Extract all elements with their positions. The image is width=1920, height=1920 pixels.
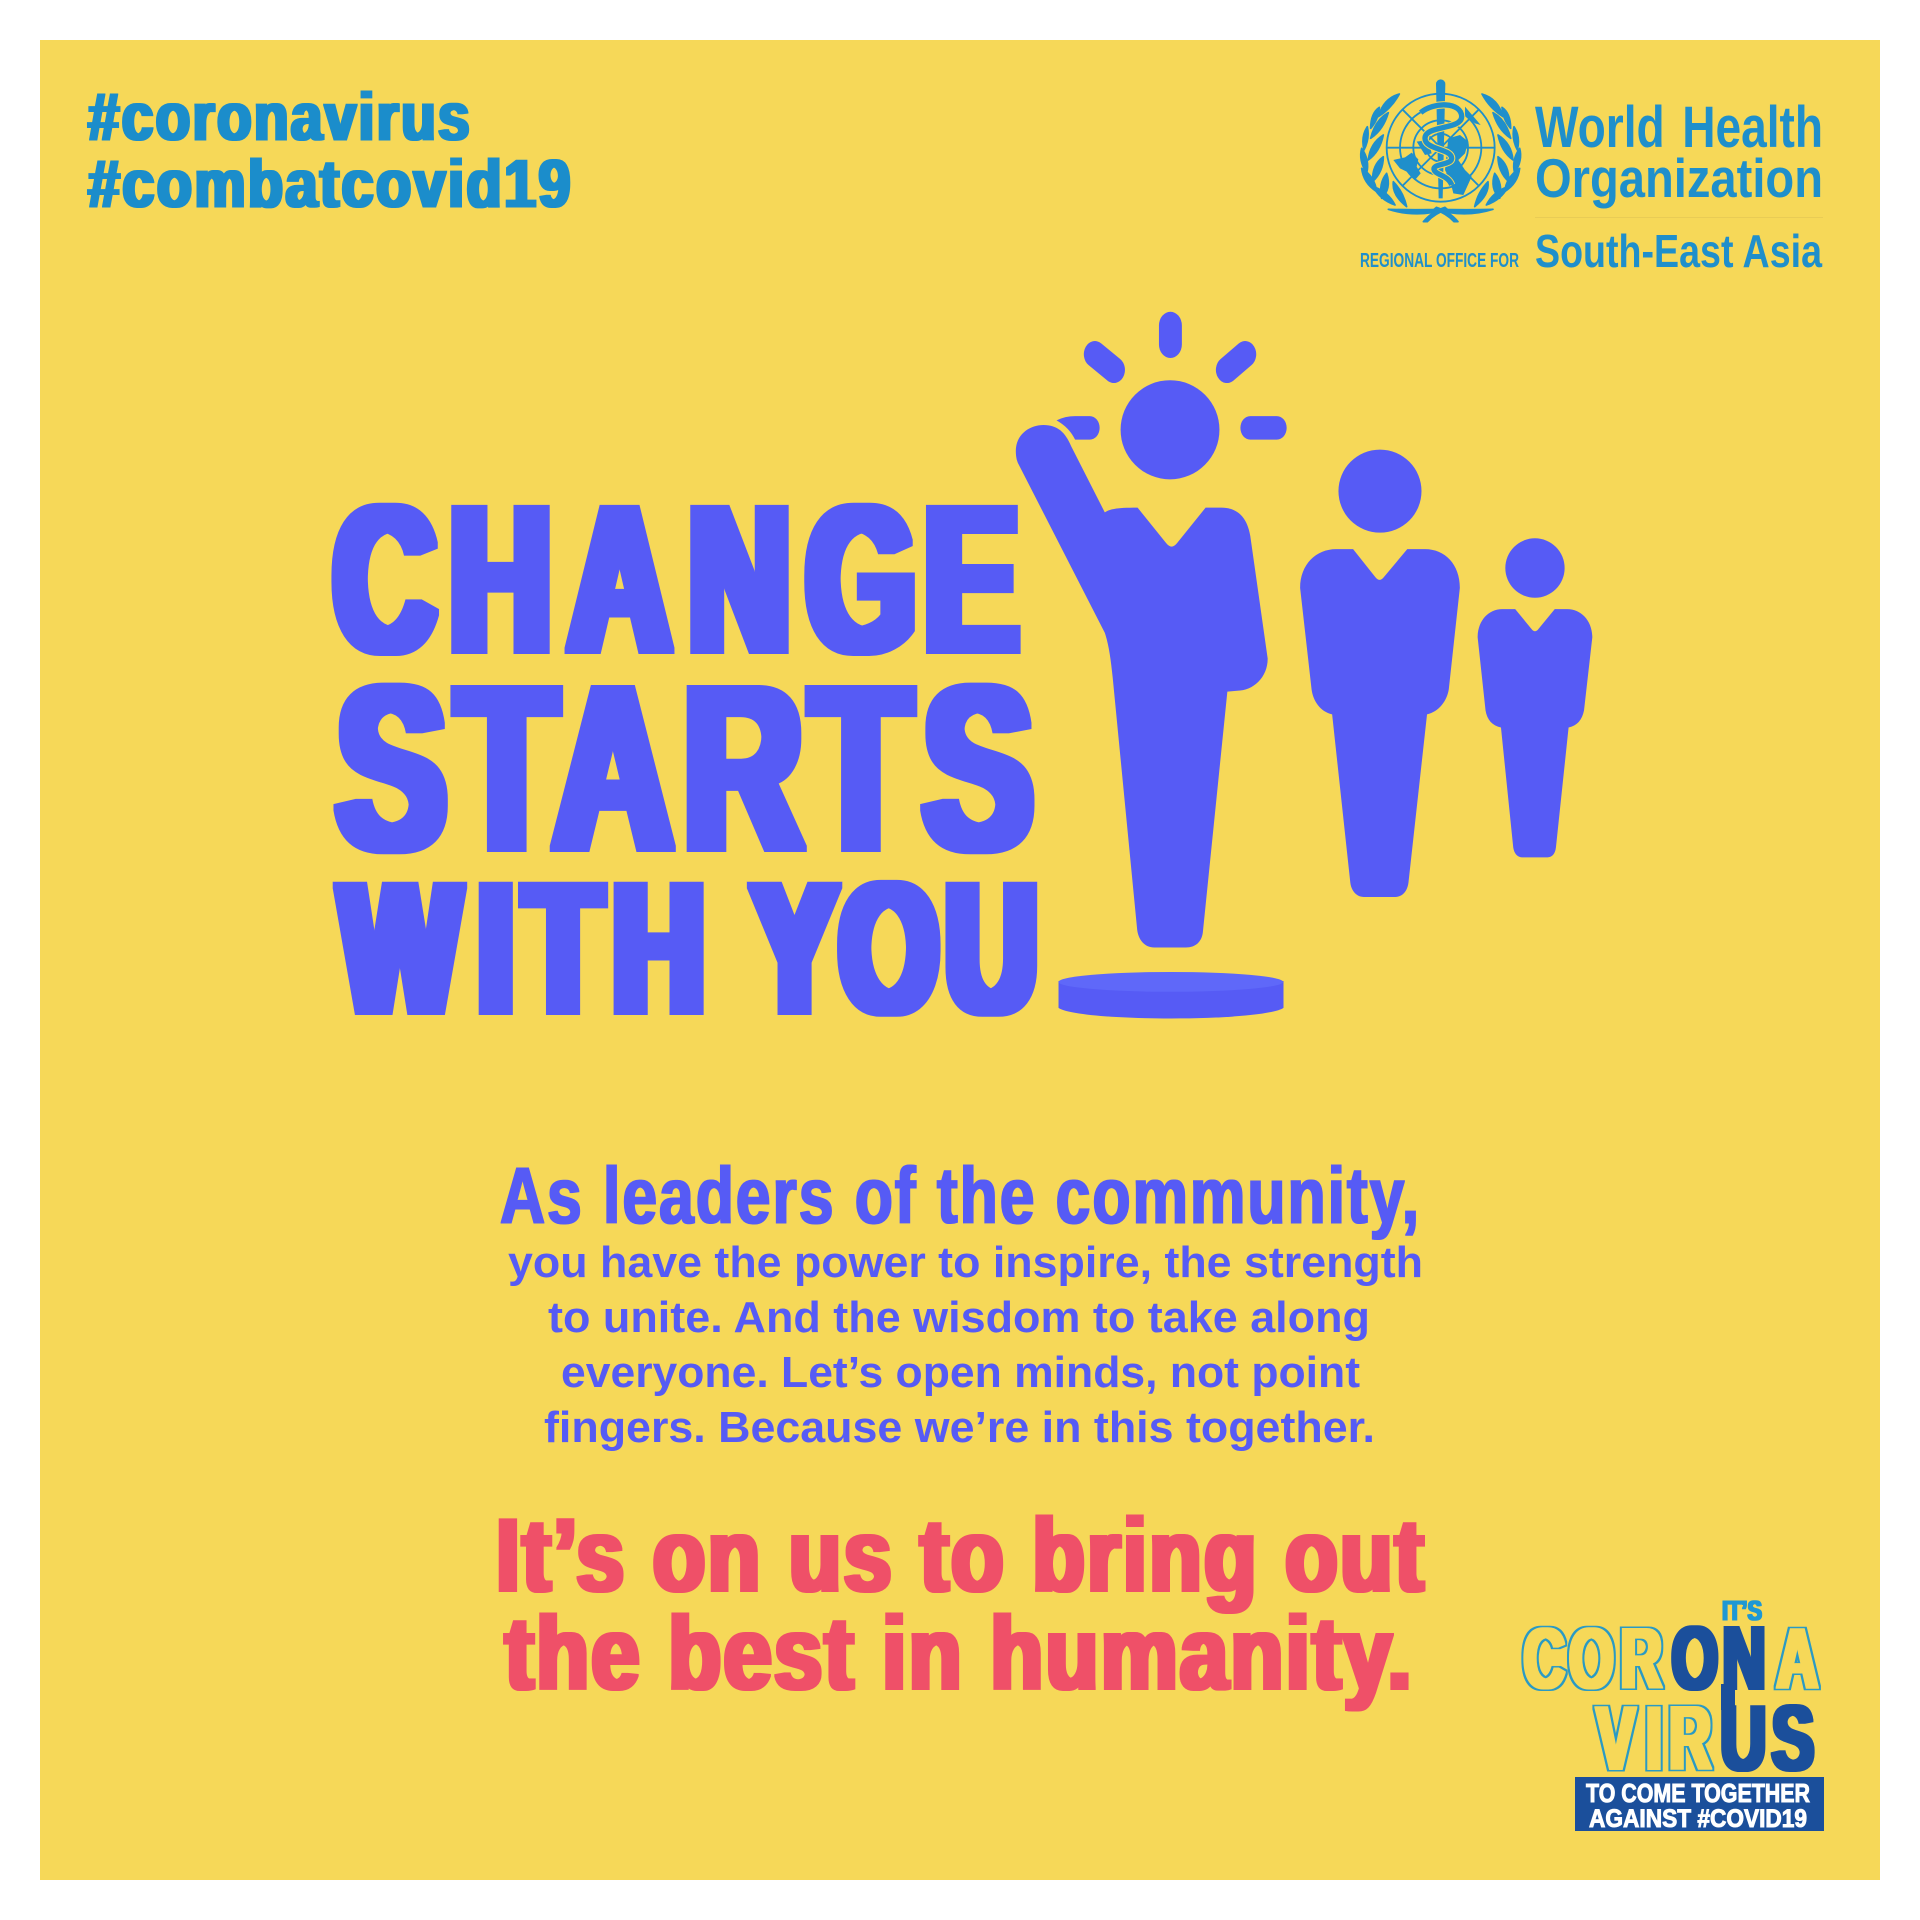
- body text: to unite. And the wisdom to take along: [548, 1293, 1370, 1342]
- callout: bring out the best in humanity: It’s on us to bring out: [496, 1498, 1426, 1614]
- banner: AGAINST #COVID19: [1589, 1805, 1807, 1833]
- WHO name text: Organization: [1535, 147, 1823, 209]
- WHO name text: REGIONAL OFFICE FOR: [1360, 249, 1519, 272]
- WHO name text: South-East Asia: [1535, 225, 1822, 277]
- hashtags: #coronavirus: [88, 79, 472, 155]
- WHO logo: emblem and name: [1360, 79, 1823, 277]
- body text: everyone. Let’s open minds, not point: [561, 1348, 1360, 1397]
- figure: middle person: [1300, 450, 1460, 897]
- outlined letters: [1523, 1612, 1818, 1790]
- WHO name text: [1360, 95, 1823, 277]
- body text: fingers. Because we’re in this together.: [544, 1403, 1375, 1452]
- illustration: three figures: [1016, 312, 1592, 1018]
- outlined letters: COR: [1523, 1612, 1662, 1707]
- title: Change starts with you: CHANGE: [334, 462, 1018, 696]
- solid letters: ON: [1672, 1609, 1766, 1709]
- outlined letters: VIR: [1596, 1689, 1711, 1790]
- banner: TO COME TOGETHER: [1586, 1778, 1810, 1808]
- solid letters: US: [1720, 1686, 1814, 1790]
- icon: WHO emblem: [1361, 79, 1521, 222]
- IT'S label: IT’S: [1722, 1595, 1762, 1626]
- body text: you have the power to inspire, the strength: [508, 1238, 1423, 1287]
- callout: bring out the best in humanity: the best in humanity.: [505, 1596, 1414, 1712]
- figure: small person: [1478, 538, 1592, 857]
- title: Change starts with you: [334, 462, 1037, 1052]
- banner: [1575, 1777, 1824, 1833]
- pedestal: [1059, 972, 1284, 1018]
- WHO name text: World Health: [1535, 95, 1823, 160]
- callout: bring out the best in humanity: [496, 1498, 1426, 1712]
- title: Change starts with you: WITH YOU: [340, 845, 1037, 1052]
- heading: as leaders of the community: As leaders of the community,: [500, 1151, 1421, 1240]
- figure: leader with raised arm and glow: [1016, 312, 1287, 947]
- solid letters: [1672, 1609, 1814, 1790]
- hashtags: #combatcovid19: [88, 146, 573, 222]
- body text: [508, 1238, 1423, 1452]
- campaign logo: it's on us: [1523, 1595, 1824, 1833]
- title: Change starts with you: STARTS: [337, 637, 1033, 899]
- hashtags: [88, 79, 573, 222]
- outlined letters: A: [1777, 1612, 1818, 1707]
